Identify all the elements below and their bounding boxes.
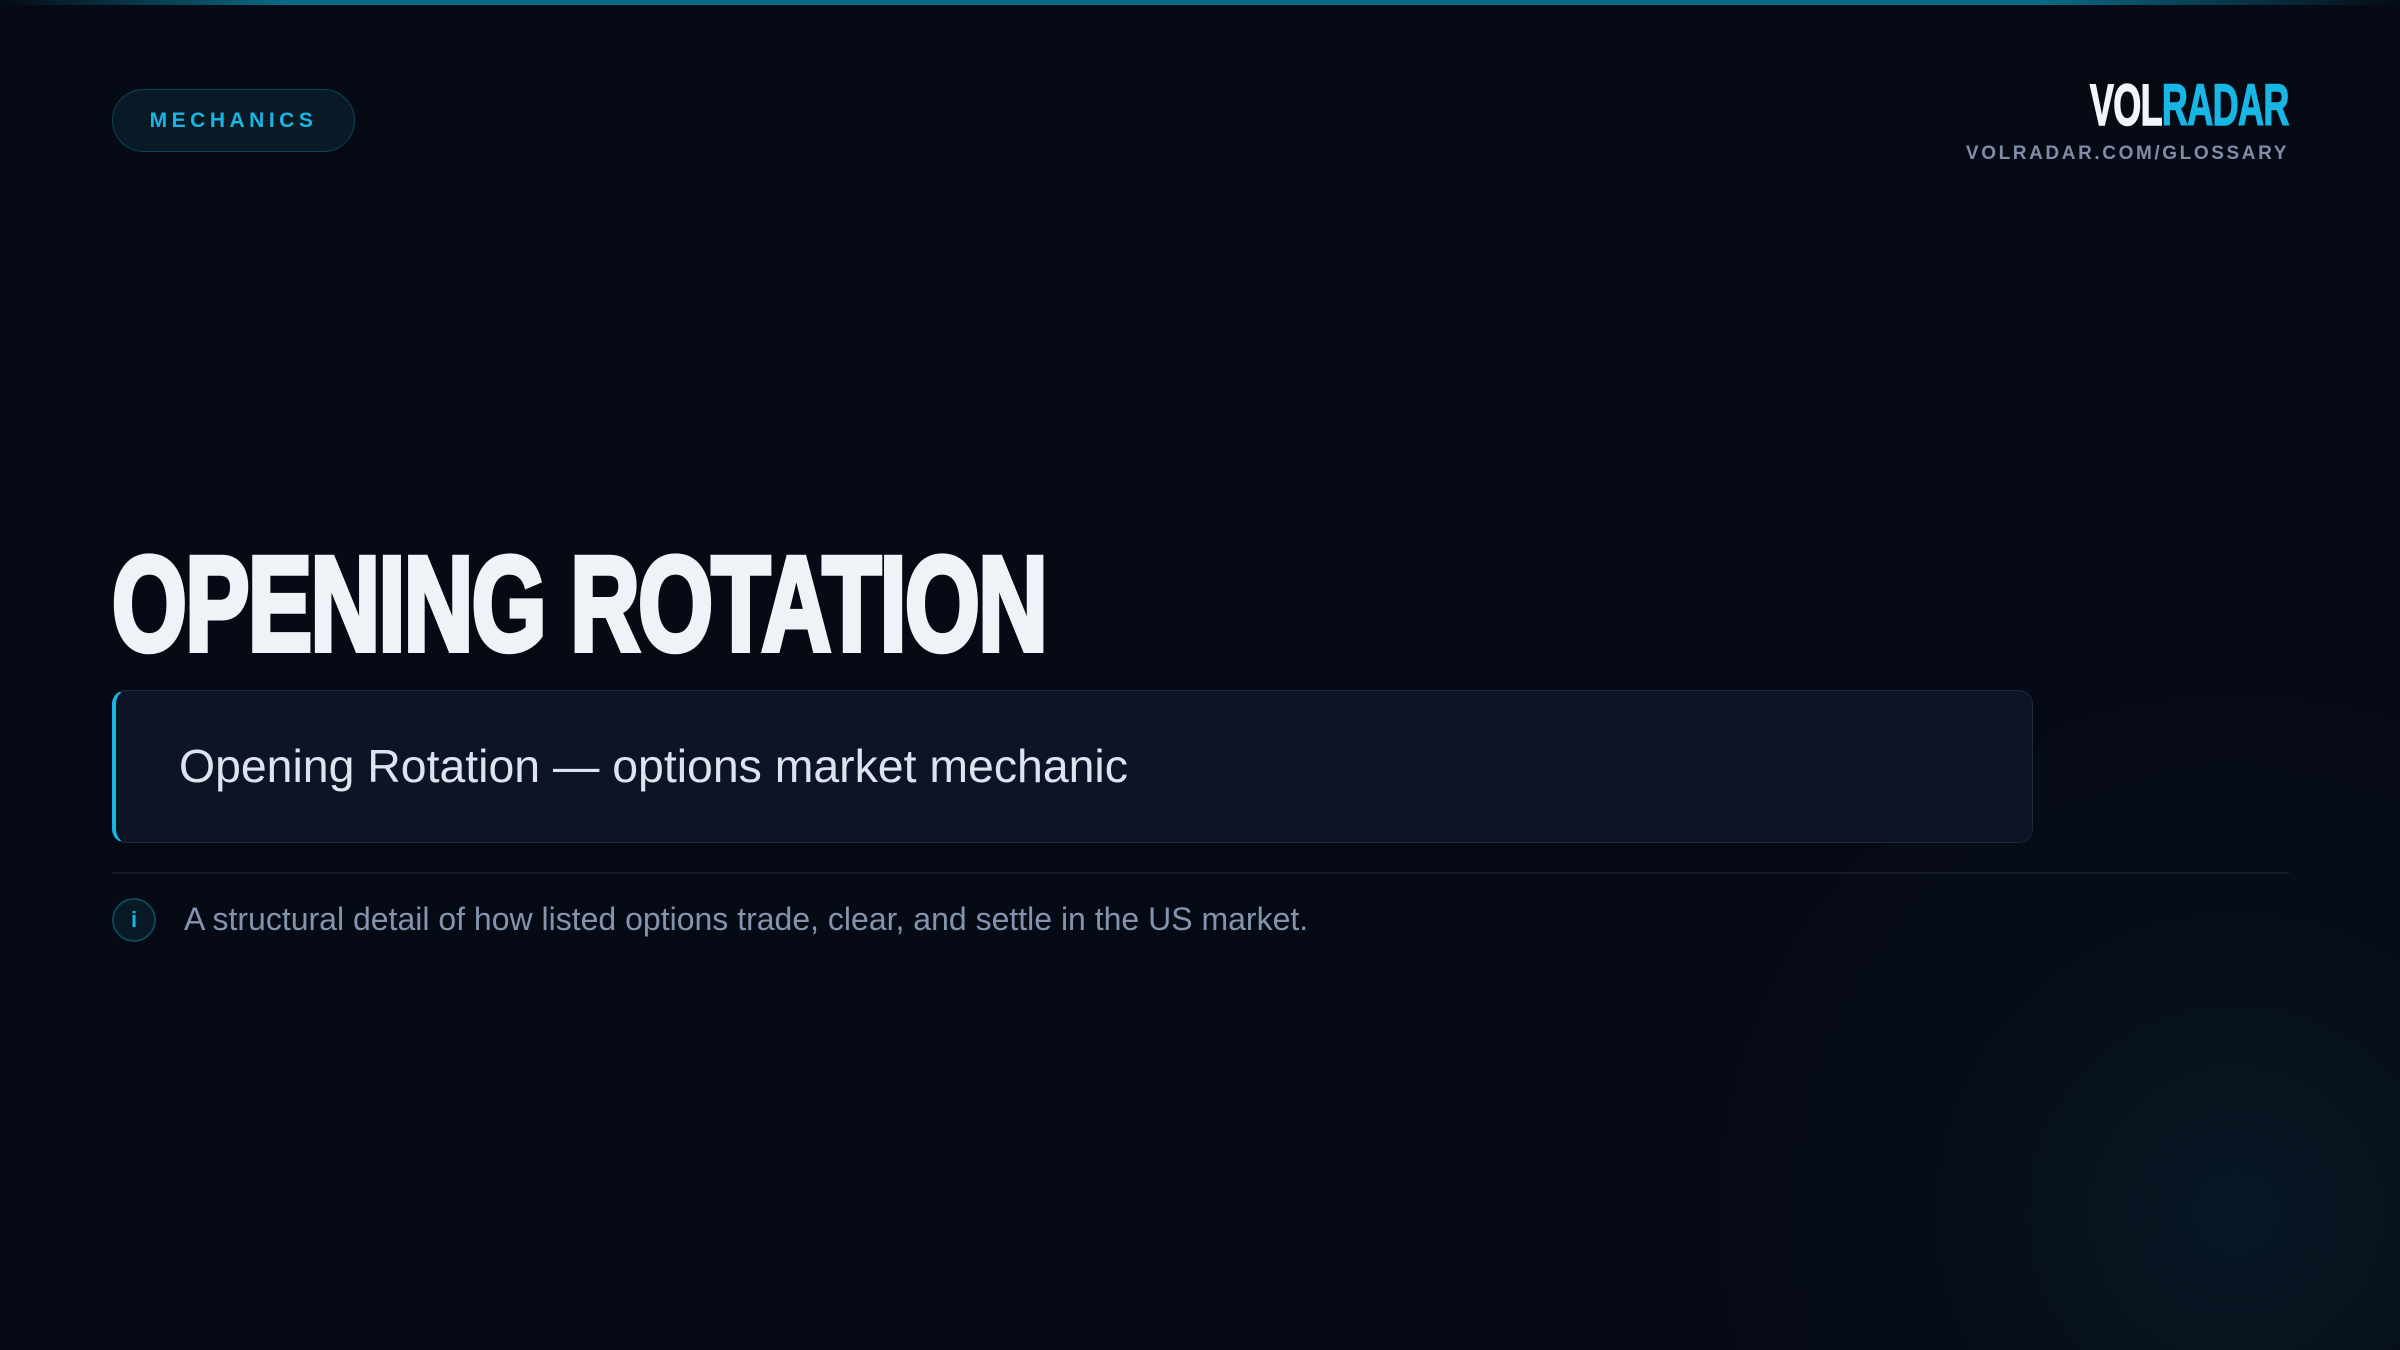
logo: VOLRADAR bbox=[2090, 73, 2289, 138]
note text: A structural detail of how listed options trade, clear, and settle in the US market. bbox=[184, 901, 1308, 937]
category pill bbox=[112, 89, 355, 152]
icon: info: i bbox=[131, 907, 137, 932]
category pill: MECHANICS bbox=[150, 108, 317, 132]
icon: info bbox=[112, 898, 156, 942]
subtitle box bbox=[112, 690, 2033, 843]
title: OPENING ROTATION bbox=[112, 530, 1046, 679]
subtitle box: Opening Rotation — options market mechanic bbox=[179, 740, 1128, 792]
url: VOLRADAR.COM/GLOSSARY bbox=[1966, 143, 2289, 164]
